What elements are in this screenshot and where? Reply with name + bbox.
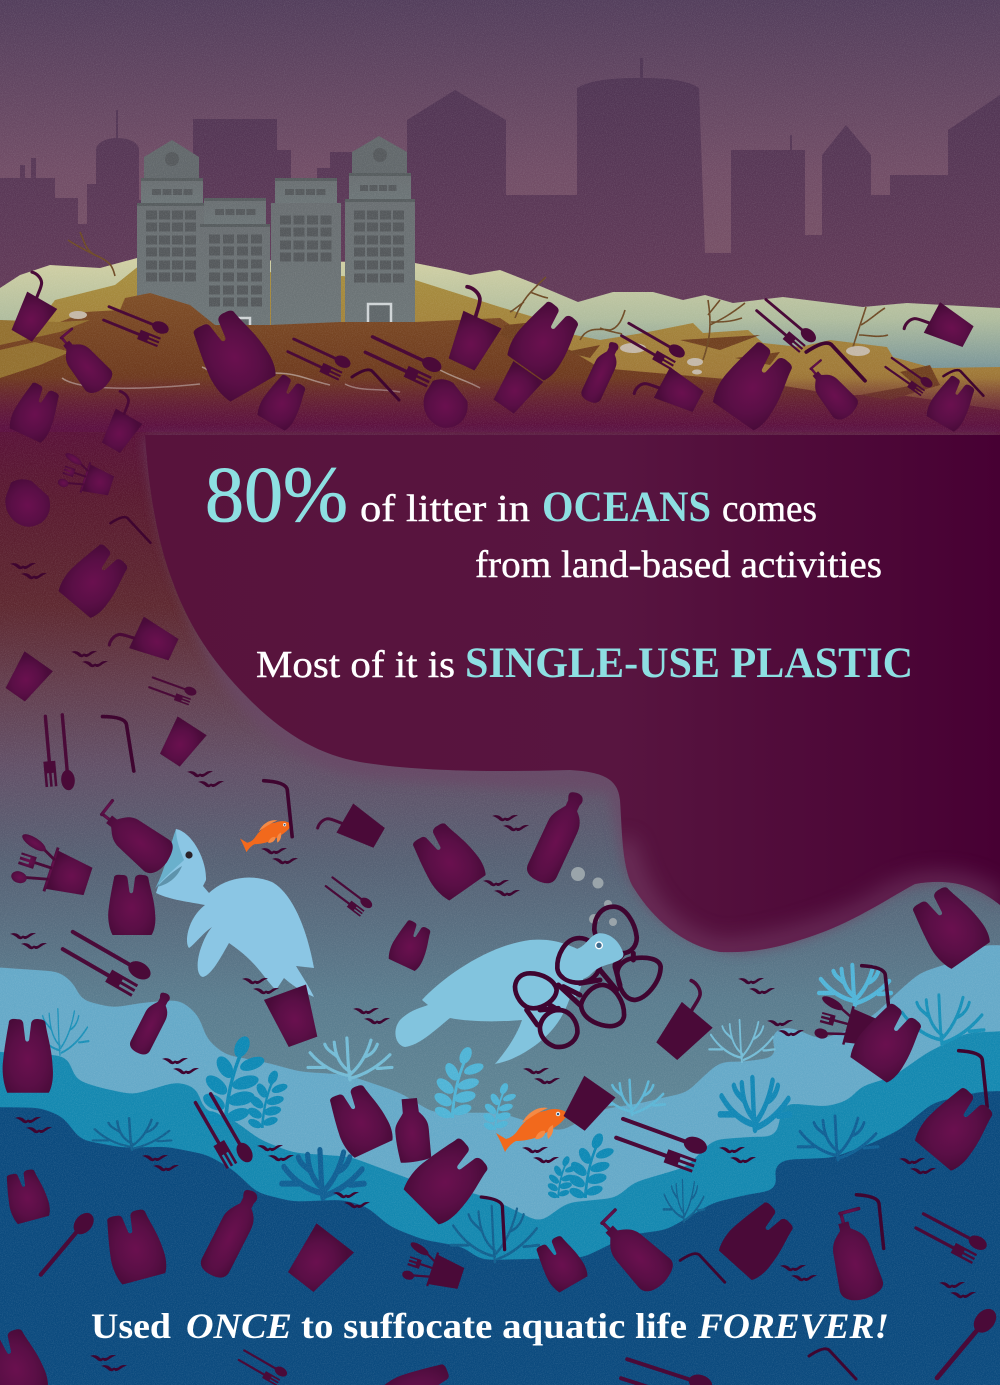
subheading: single-use plastic: SINGLE-USE PLASTIC [465,640,913,687]
closing slogan: Used [91,1306,171,1346]
closing slogan: to suffocate aquatic life [301,1306,687,1346]
plastic six-pack rings [515,907,661,1047]
sea floor layer: teal [0,1030,1000,1385]
heading: 80 percent of litter [205,452,882,586]
litter on land [2,272,983,455]
bubbles [571,867,617,926]
litter near the reef [3,959,1000,1228]
ochre patches on the mound [0,320,90,378]
illustration: orange fish large [496,1108,568,1152]
litter in mid water [1,450,994,1000]
heading: 80 percent of litter: OCEANS [542,484,711,531]
building 2 [200,198,270,332]
building 1 [137,140,204,328]
heading: 80 percent of litter: comes [722,488,817,530]
city skyline silhouette [0,58,1000,310]
grey apartment buildings [137,136,415,332]
land: ochre ground [0,265,1000,440]
building 3 [271,178,341,328]
land fades to maroon [0,378,1000,436]
water column background [0,432,1000,1385]
closing slogan: FOREVER! [697,1306,889,1346]
maroon text panel shape [145,435,1000,953]
background: polluted sky [0,0,1000,310]
corals and sea plants [31,965,984,1262]
dry trees and rocks on the land [62,232,888,392]
illustration: turtle eating a plastic bottle [155,829,314,997]
heading: 80 percent of litter: from land-based activities [475,544,882,586]
closing slogan: ONCE [186,1306,292,1346]
subheading: single-use plastic: Most of it is [256,644,455,686]
turtle head [563,933,623,980]
illustration: orange fish small [240,820,292,852]
closing slogan [91,1306,889,1346]
building 4 [345,136,415,328]
turtle body [395,940,590,1064]
sea floor layer: light blue [0,945,1000,1385]
sea floor layer: deep navy [0,1090,1000,1385]
land: pale hill [0,258,1000,400]
subheading: single-use plastic [256,640,913,687]
heading: 80 percent of litter: of litter in [360,488,530,530]
water ripple marks [10,563,976,1371]
land: brown rubbish mound [0,293,1000,440]
illustration: turtle trapped in six-pack rings [395,907,661,1064]
litter on the deep sea bed [0,1167,1000,1385]
heading: 80 percent of litter: 80% [205,452,348,539]
